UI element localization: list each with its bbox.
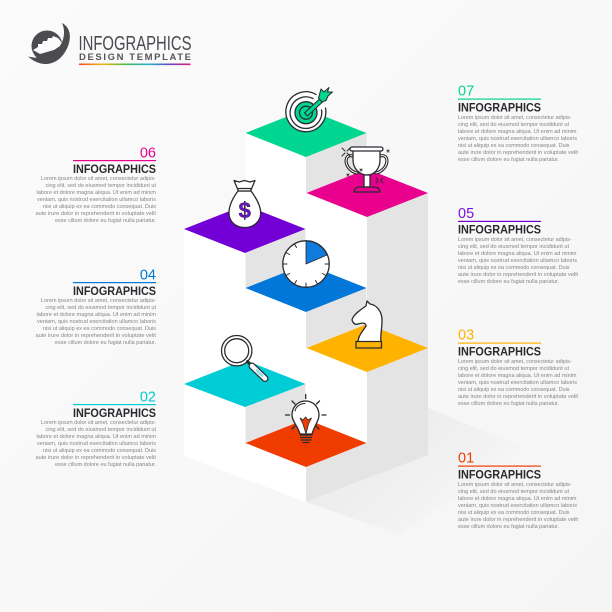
body 05: labore et dolore magna aliqua. Ut enim ad minim: [458, 251, 577, 257]
body 04: aute irure dolor in reprehenderit in voluptate velit: [36, 333, 156, 339]
body 03: nisi ut aliquip ex ea commodo consequat. Duis: [458, 387, 570, 393]
staircase: [184, 109, 428, 502]
body 06: esse cillum dolore eu fugiat nulla pariatur.: [55, 218, 156, 224]
logo subtitle: DESIGN TEMPLATE: [79, 52, 191, 63]
body 01: esse cillum dolore eu fugiat nulla pariatur.: [458, 524, 559, 530]
body 01: Lorem ipsum dolor sit amet, consectetur adipis-: [458, 482, 572, 488]
body 07: esse cillum dolore eu fugiat nulla pariatur.: [458, 157, 559, 163]
icon: trophy: [342, 147, 389, 192]
stair white faces: [184, 133, 367, 502]
rule 06: [73, 160, 156, 161]
rule 04: [73, 282, 156, 283]
rule 01: [458, 466, 541, 467]
body 01: veniam, quis nostrud exercitation ullamco laboris: [458, 503, 577, 509]
body 05: nisi ut aliquip ex ea commodo consequat. Duis: [458, 265, 570, 271]
logo title: INFOGRAPHICS: [78, 33, 192, 55]
icon: clock: [283, 241, 329, 287]
body 07: veniam, quis nostrud exercitation ullamco laboris: [458, 136, 577, 142]
body 05: esse cillum dolore eu fugiat nulla pariatur.: [458, 279, 559, 285]
body 03: esse cillum dolore eu fugiat nulla pariatur.: [458, 401, 559, 407]
body 03: labore et dolore magna aliqua. Ut enim ad minim: [458, 373, 577, 379]
body 05: veniam, quis nostrud exercitation ullamco laboris: [458, 258, 577, 264]
body 04: veniam, quis nostrud exercitation ullamco laboris: [37, 319, 156, 325]
title 07: INFOGRAPHICS: [458, 100, 541, 114]
step 2 top: [184, 360, 306, 407]
number 04: 04: [140, 268, 156, 284]
body 07: aute irure dolor in reprehenderit in voluptate velit: [458, 150, 578, 156]
number 03: 03: [458, 328, 474, 344]
title 04: INFOGRAPHICS: [73, 284, 156, 298]
number 05: 05: [458, 206, 474, 222]
body 02: veniam, quis nostrud exercitation ullamco laboris: [37, 441, 156, 447]
body 06: nisi ut aliquip ex ea commodo consequat. Duis: [43, 204, 156, 210]
body 03: Lorem ipsum dolor sit amet, consectetur adipis-: [458, 359, 572, 365]
icon: target: [286, 88, 332, 132]
body 04: labore et dolore magna aliqua. Ut enim ad minim: [36, 312, 156, 318]
body 04: Lorem ipsum dolor sit amet, consectetur adipis-: [41, 298, 156, 304]
body 02: cing elit, sed do eiusmod tempor incididunt ut: [46, 427, 156, 433]
block 01: [458, 450, 578, 530]
icon: money bag: [229, 180, 261, 228]
body 06: cing elit, sed do eiusmod tempor incididunt ut: [46, 183, 156, 189]
rainbow rule: [79, 64, 190, 65]
rule 03: [458, 342, 541, 344]
body 05: aute irure dolor in reprehenderit in voluptate velit: [458, 272, 578, 278]
body 07: Lorem ipsum dolor sit amet, consectetur adipis-: [458, 115, 572, 121]
body 07: cing elit, sed do eiusmod tempor incididunt ut: [458, 122, 569, 128]
body 01: cing elit, sed do eiusmod tempor incididunt ut: [458, 489, 569, 495]
title 02: INFOGRAPHICS: [73, 406, 156, 420]
rule 05: [458, 221, 541, 222]
body 01: [458, 482, 578, 530]
number 02: 02: [140, 390, 156, 406]
step 6 top: [184, 205, 306, 253]
body 05: cing elit, sed do eiusmod tempor incididunt ut: [458, 244, 569, 250]
body 01: aute irure dolor in reprehenderit in voluptate velit: [458, 517, 578, 523]
body 05: Lorem ipsum dolor sit amet, consectetur adipis-: [458, 237, 572, 243]
body 06: [36, 176, 156, 224]
body 06: veniam, quis nostrud exercitation ullamco laboris: [37, 197, 156, 203]
block 03: [458, 328, 578, 407]
body 02: esse cillum dolore eu fugiat nulla pariatur.: [55, 462, 156, 468]
body 02: [36, 420, 156, 468]
body 02: labore et dolore magna aliqua. Ut enim ad minim: [36, 434, 156, 440]
number 01: 01: [458, 450, 474, 466]
stair grey faces: [246, 133, 428, 502]
block 02: [36, 390, 156, 468]
stair shadow: [306, 408, 525, 535]
body 06: labore et dolore magna aliqua. Ut enim ad minim: [36, 190, 156, 196]
body 04: nisi ut aliquip ex ea commodo consequat. Duis: [43, 326, 156, 332]
body 07: labore et dolore magna aliqua. Ut enim ad minim: [458, 129, 577, 135]
block 05: [458, 206, 578, 285]
step 1 top: [246, 419, 366, 467]
logo mark: [28, 23, 70, 64]
title 01: INFOGRAPHICS: [458, 468, 541, 482]
body 04: [36, 298, 156, 346]
step 7 top: [246, 109, 366, 157]
number 06: 06: [140, 146, 156, 162]
number 07: 07: [458, 84, 474, 100]
body 03: cing elit, sed do eiusmod tempor incididunt ut: [458, 366, 569, 372]
icon: magnifying glass: [222, 336, 265, 378]
body 06: aute irure dolor in reprehenderit in voluptate velit: [36, 211, 156, 217]
icon: chess knight: [352, 301, 382, 348]
body 01: labore et dolore magna aliqua. Ut enim ad minim: [458, 496, 577, 502]
step 5 top: [306, 169, 428, 217]
body 02: Lorem ipsum dolor sit amet, consectetur adipis-: [41, 420, 156, 426]
body 06: Lorem ipsum dolor sit amet, consectetur adipis-: [41, 176, 156, 182]
step 4 top: [246, 264, 366, 312]
body 04: esse cillum dolore eu fugiat nulla pariatur.: [55, 340, 156, 346]
rule 02: [73, 404, 156, 405]
block 06: [36, 146, 156, 224]
block 07: [458, 84, 578, 163]
title 05: INFOGRAPHICS: [458, 222, 541, 236]
body 07: nisi ut aliquip ex ea commodo consequat. Duis: [458, 143, 570, 149]
body 03: veniam, quis nostrud exercitation ullamco laboris: [458, 380, 577, 386]
body 07: [458, 115, 578, 163]
body 04: cing elit, sed do eiusmod tempor incididunt ut: [46, 305, 156, 311]
body 05: [458, 237, 578, 285]
dollar sign: $: [239, 198, 251, 223]
rule 07: [458, 98, 541, 100]
title 06: INFOGRAPHICS: [73, 162, 156, 176]
body 01: nisi ut aliquip ex ea commodo consequat. Duis: [458, 510, 570, 516]
title 03: INFOGRAPHICS: [458, 344, 541, 358]
icon: light bulb: [286, 394, 326, 442]
step 3 top: [306, 324, 428, 372]
body 03: [458, 359, 578, 407]
body 02: nisi ut aliquip ex ea commodo consequat. Duis: [43, 448, 156, 454]
body 02: aute irure dolor in reprehenderit in voluptate velit: [36, 455, 156, 461]
body 03: aute irure dolor in reprehenderit in voluptate velit: [458, 394, 578, 400]
block 04: [36, 268, 156, 346]
logo: [28, 23, 192, 65]
